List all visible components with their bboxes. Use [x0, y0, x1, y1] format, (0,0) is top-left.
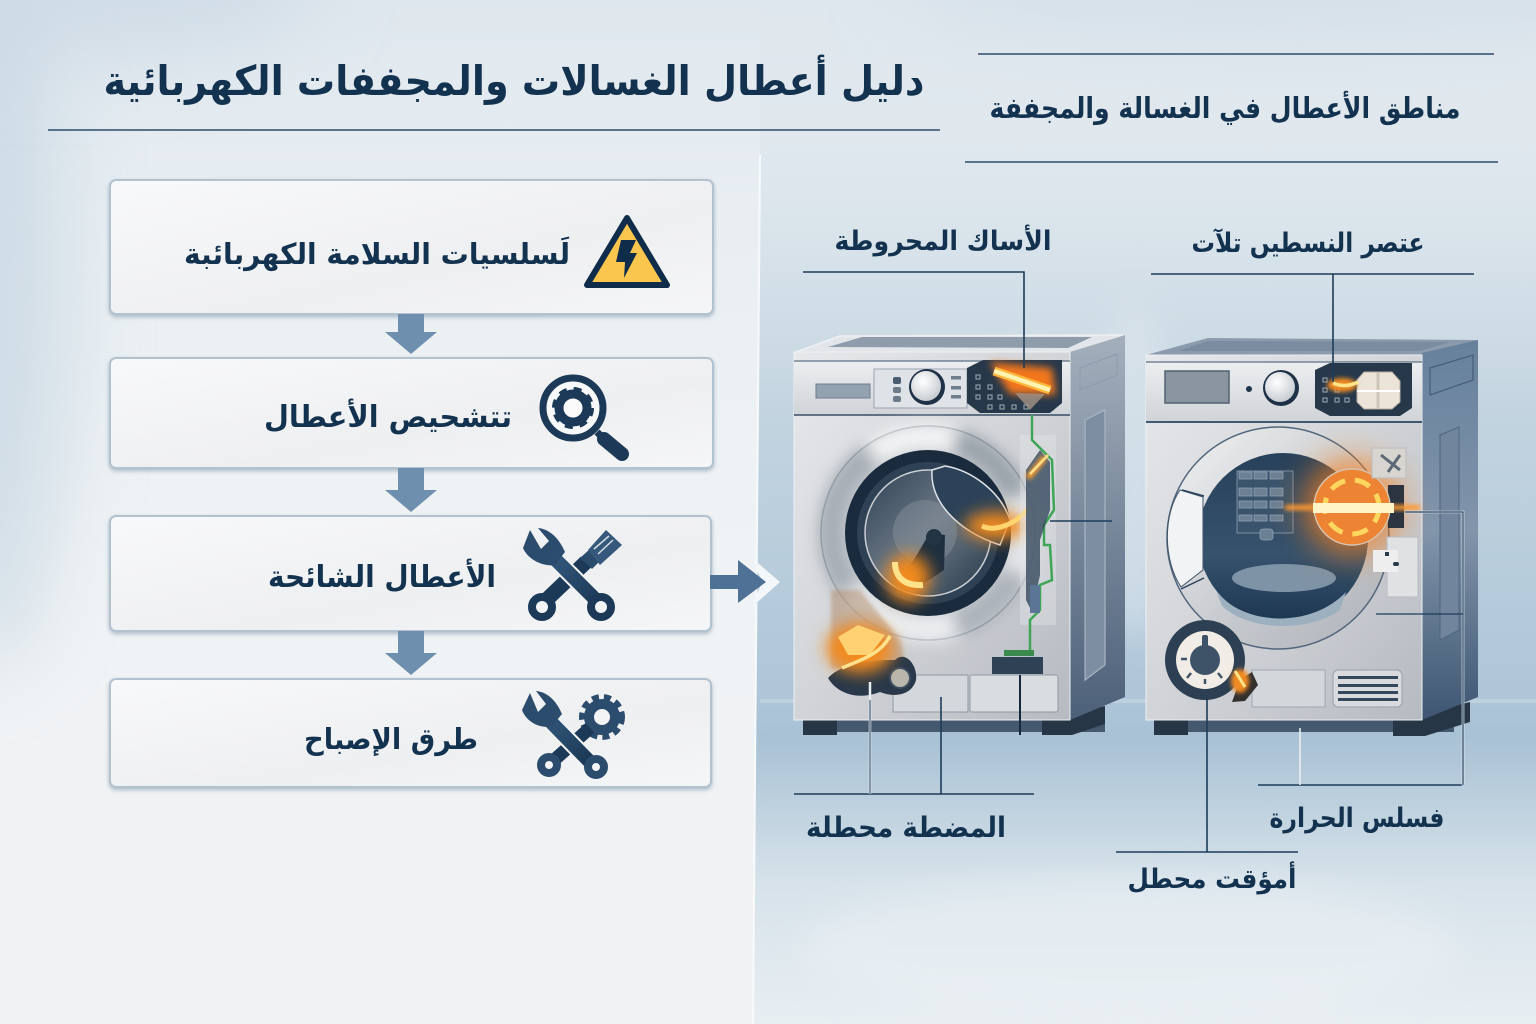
panel: electrical safety — [110, 180, 713, 314]
panel: repair methods — [110, 679, 711, 787]
callout: pump — [794, 521, 1112, 844]
washing machine — [793, 335, 1125, 735]
cabinet — [793, 335, 1125, 720]
arrow: to appliances — [710, 558, 780, 607]
arrow: down 2 — [385, 468, 437, 512]
callout: timer — [1116, 697, 1298, 895]
panel: electrical safety: لَسلسيات السلامة الكهربائبة — [184, 237, 570, 271]
title underline — [48, 129, 940, 131]
heating element glow — [1285, 459, 1420, 555]
callout: pump: المضطة محطلة — [806, 811, 1006, 844]
callout: thermostat — [1258, 512, 1463, 834]
callout: heating element: عتصر النسطيں تلآت — [1192, 228, 1424, 259]
title: دليل أعطال الغسالات والمجففات الكهربائية — [104, 54, 924, 106]
callout: heating element — [1151, 228, 1474, 382]
glow: burnt wires at panel — [990, 362, 1056, 410]
callout: burnt wires: الأساك المحروطة — [834, 224, 1052, 257]
panel: diagnosis — [110, 358, 713, 468]
lower panels — [893, 675, 1058, 712]
icon: warning triangle — [587, 218, 667, 285]
control panel — [1146, 362, 1422, 422]
callout: burnt wires — [803, 224, 1052, 368]
panel: common faults: الأعطال الشائحة — [268, 558, 496, 595]
panel: common faults — [110, 516, 711, 631]
wiring cut-away — [992, 415, 1056, 674]
door — [821, 426, 1035, 640]
cabinet — [1146, 338, 1478, 720]
icon: wrench and gear — [522, 691, 622, 775]
callout: thermostat: فسلس الحرارة — [1270, 803, 1444, 834]
door — [1167, 427, 1389, 649]
pump with glow — [826, 590, 916, 696]
glow: door faults — [886, 508, 1029, 602]
arrow: down 1 — [385, 314, 437, 354]
tumble dryer — [1146, 338, 1478, 736]
socket and label plate — [1372, 448, 1418, 597]
timer dial — [1165, 620, 1258, 702]
panel: diagnosis: تتشحيص الأعطال — [264, 398, 512, 435]
filter grid inside drum — [1237, 471, 1293, 540]
control panel — [794, 360, 1070, 415]
heading: fault zones: مناطق الأعطال في الغسالة والمجففة — [990, 90, 1460, 125]
callout: timer: أمؤقت محطل — [1128, 861, 1296, 895]
feet and floor shadow — [803, 706, 1105, 735]
arrow: down 3 — [385, 631, 437, 675]
icon: magnifier with gear — [543, 378, 622, 454]
icon: crossed wrench and screwdriver — [523, 528, 622, 617]
feet — [1154, 702, 1470, 736]
lower panel and vent — [1252, 670, 1402, 707]
panel: repair methods: طرق الإصباح — [304, 722, 478, 756]
